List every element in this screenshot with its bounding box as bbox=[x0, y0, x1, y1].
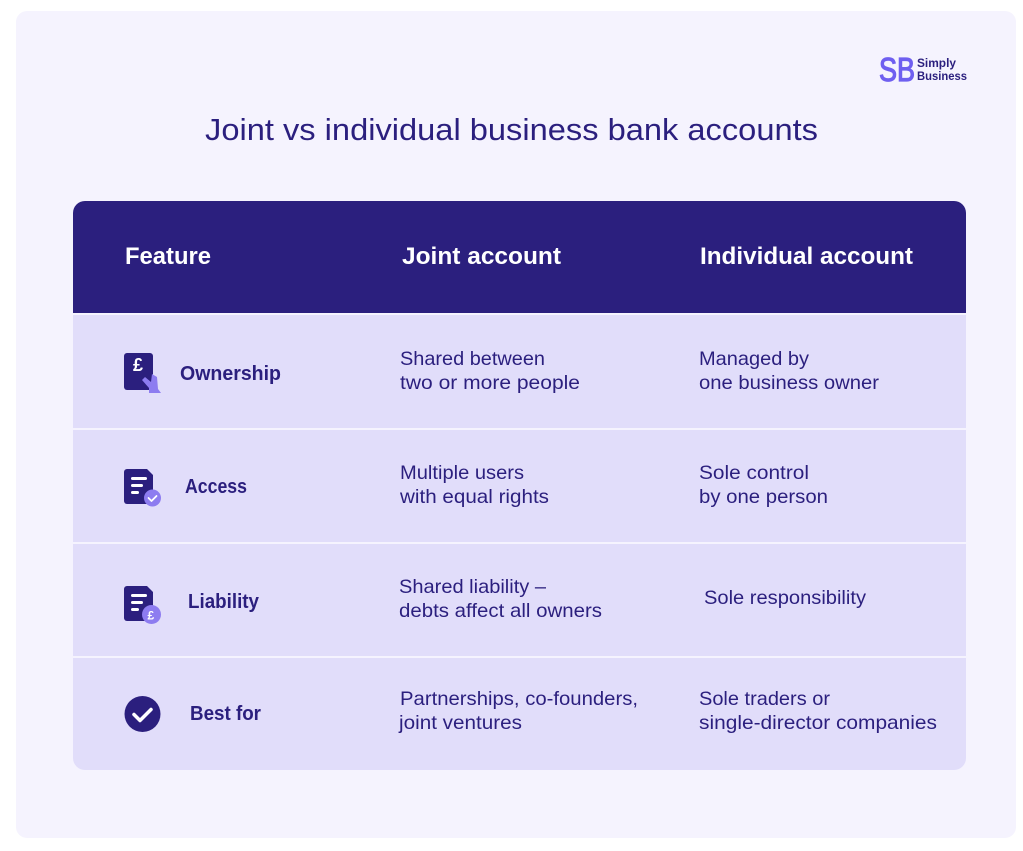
row: Best for: joint ventures bbox=[398, 712, 522, 734]
table header: Joint account bbox=[402, 243, 561, 270]
row: Ownership bbox=[124, 348, 880, 394]
logo: Simply Business: SB bbox=[879, 51, 915, 88]
row: Access bbox=[124, 462, 828, 508]
logo: Simply Business: Simply bbox=[917, 56, 956, 70]
row: Ownership: Ownership bbox=[180, 363, 281, 385]
row: Best for: Partnerships, co-founders, bbox=[400, 688, 638, 710]
row: Access: with equal rights bbox=[399, 486, 549, 508]
row: Liability: Shared liability – bbox=[399, 576, 546, 598]
row: Ownership: one business owner bbox=[699, 372, 880, 394]
table header: Individual account bbox=[700, 243, 913, 270]
title: Joint vs individual business bank accounts bbox=[205, 112, 818, 147]
row: Access: by one person bbox=[699, 486, 828, 508]
comparison table bbox=[73, 201, 966, 770]
logo: Simply Business bbox=[879, 51, 967, 88]
table header: Feature bbox=[125, 243, 211, 270]
icon: pound document with hand: £ bbox=[133, 355, 143, 375]
table body background bbox=[73, 300, 966, 770]
row: Access: Access bbox=[185, 476, 247, 498]
icon: document with check bbox=[124, 469, 161, 506]
row: Best for: Best for bbox=[190, 703, 261, 725]
table header bbox=[73, 201, 966, 313]
icon: document with pound coin: £ bbox=[148, 608, 154, 622]
logo: Simply Business: Business bbox=[917, 69, 967, 83]
icon: document with pound coin bbox=[124, 586, 161, 624]
row: Ownership: two or more people bbox=[400, 372, 580, 394]
row: Liability: Sole responsibility bbox=[704, 587, 866, 609]
row: Liability bbox=[124, 576, 866, 624]
row: Liability: Liability bbox=[188, 591, 260, 613]
row: Liability: debts affect all owners bbox=[399, 600, 602, 622]
row: Access: Multiple users bbox=[400, 462, 524, 484]
row: Best for: Sole traders or bbox=[699, 688, 831, 710]
icon: pound document with hand bbox=[124, 353, 161, 393]
row: Ownership: Managed by bbox=[699, 348, 809, 370]
row: Best for: single-director companies bbox=[699, 712, 937, 734]
row: Ownership: Shared between bbox=[400, 348, 545, 370]
row: Best for bbox=[124, 688, 937, 734]
icon: check circle bbox=[124, 696, 160, 732]
row: Access: Sole control bbox=[699, 462, 809, 484]
